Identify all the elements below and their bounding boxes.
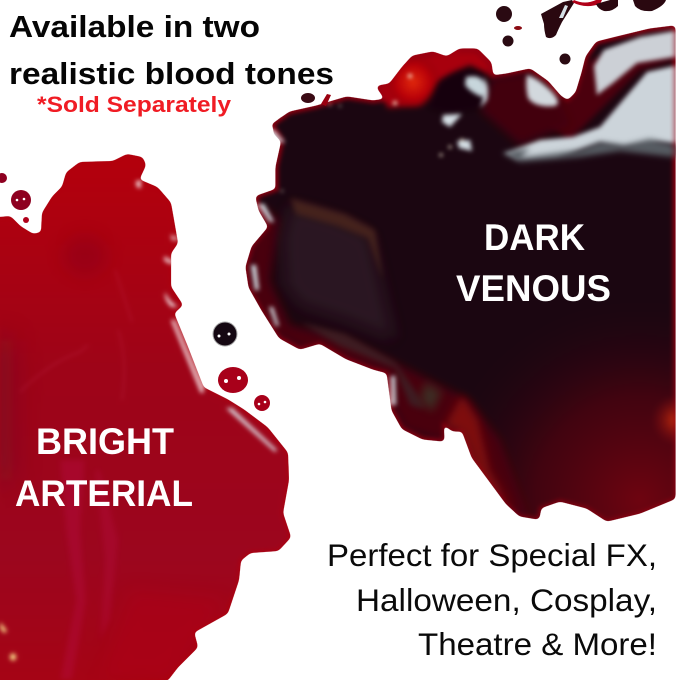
dark pool base (247, 27, 674, 520)
label: dark venous: VENOUS (456, 268, 611, 309)
shading and streaks in red pool (0, 236, 116, 679)
label: bright arterial: ARTERIAL (15, 473, 193, 514)
uses text block (327, 537, 657, 662)
label: dark venous (456, 217, 611, 309)
uses text block: Perfect for Special FX, (327, 537, 657, 573)
label: bright arterial (15, 421, 193, 514)
droplets around red pool (0, 173, 270, 411)
bright arterial blood pool (0, 155, 290, 680)
droplets above dark pool (301, 0, 666, 106)
sold separately note: *Sold Separately (37, 92, 232, 117)
reflection: center puddle hole (526, 75, 558, 106)
label: bright arterial: BRIGHT (36, 421, 174, 462)
reflection shadow band (502, 139, 674, 162)
shading inside the dark pool (240, 32, 677, 530)
reflection: upper right (594, 31, 674, 95)
dark venous blood pool (240, 27, 677, 530)
specular dots (277, 74, 464, 192)
highlights around dark pool (251, 77, 488, 405)
uses text block: Theatre & More! (418, 626, 657, 662)
label: dark venous: DARK (484, 217, 585, 258)
reflection: lower right (504, 66, 674, 160)
heading: realistic blood tones (9, 56, 334, 91)
heading: Available in two (9, 9, 260, 44)
red pool base (0, 155, 290, 680)
warm highlights at lower left (0, 622, 16, 660)
heading (9, 9, 334, 91)
highlight: large bubble (465, 76, 485, 97)
red pool highlights (136, 181, 277, 452)
uses text block: Halloween, Cosplay, (356, 582, 657, 618)
